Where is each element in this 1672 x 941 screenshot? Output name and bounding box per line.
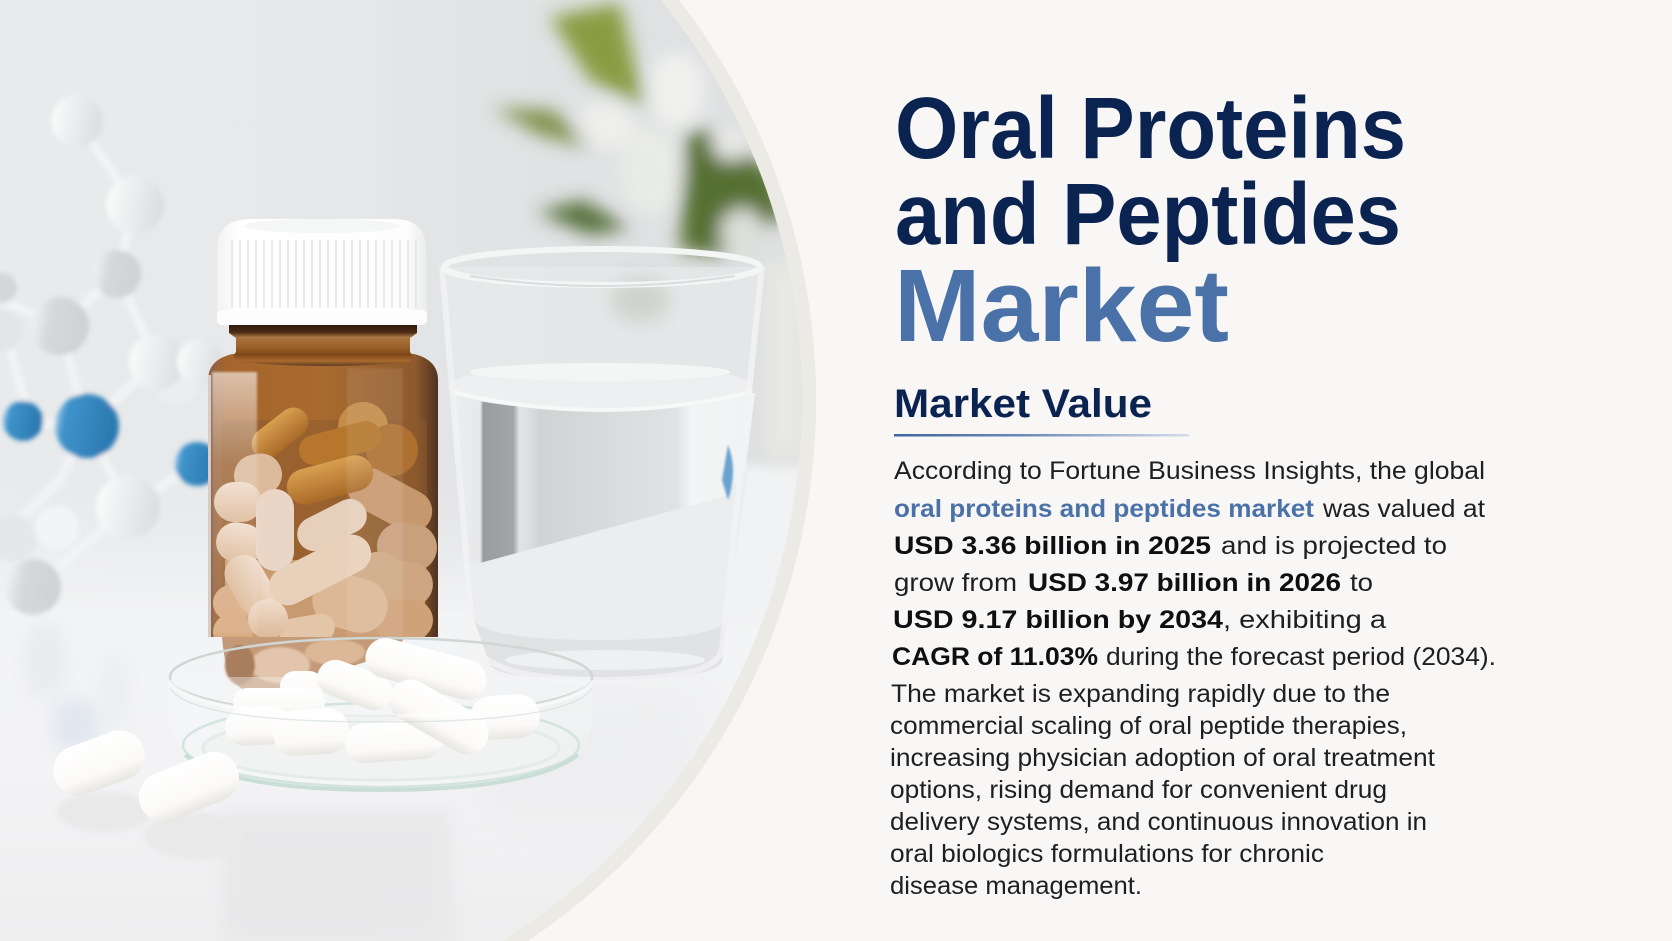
title [894,80,1406,363]
paragraph: market drivers: commercial scaling of oral peptide therapies, [890,712,1407,740]
bottle neck [229,325,417,366]
paragraph: market drivers: oral biologics formulations for chronic [890,840,1324,868]
empty upper glass [601,267,728,332]
paragraph: market drivers: The market is expanding rapidly due to the [891,680,1390,708]
blue refraction [722,445,733,500]
paragraph: market value statistics: to [1350,569,1373,597]
dish front rim [170,680,592,716]
title: Oral Proteins [895,80,1406,177]
paragraph: market value statistics: USD 3.36 billion in 2025 [894,532,1211,560]
paragraph: market value statistics: oral proteins and peptides market [894,495,1315,523]
paragraph: market value statistics: CAGR of 11.03% [892,643,1098,671]
paragraph: market value statistics: USD 3.97 billion in 2026 [1028,569,1341,597]
paragraph: market value statistics: during the forecast period (2034). [1106,643,1496,671]
bottle glass highlights [212,372,257,634]
paragraph: market drivers: options, rising demand for convenient drug [890,776,1387,804]
bottle reflection on table [238,818,442,884]
water column [453,393,755,640]
paragraph: market drivers: increasing physician adoption of oral treatment [890,744,1435,772]
glass walls and rim [442,267,762,680]
glass reflection on table [480,690,700,820]
photo wall background [399,0,786,500]
paragraph: market value statistics: was valued at [1322,495,1485,523]
loose capsule left [54,730,144,796]
thick glass base [474,621,722,677]
loose capsule right [139,752,239,822]
water surface [448,374,747,408]
paragraph: market value statistics: According to Fortune Business Insights, the global [894,457,1485,485]
paragraph: market value statistics: and is projected to [1221,532,1447,560]
molecule reflection on table [36,638,102,749]
dish base [226,677,283,689]
light lower water [480,509,692,640]
paragraph: market value statistics: USD 9.17 billion by 2034 [893,606,1223,634]
panel: product photo [0,0,820,941]
white capsules in dish [224,634,541,764]
title: Market [894,248,1229,363]
title: and Peptides [895,166,1401,263]
bottle body [208,354,438,637]
loose capsule shadows [60,794,216,854]
dish back rim [170,638,592,716]
photo table surface [0,620,760,941]
paragraph: market drivers [890,680,1435,900]
paragraph: market value statistics [892,457,1496,671]
paragraph: market value statistics: , exhibiting a [1223,606,1386,634]
section heading: Market Value: Market Value [894,382,1152,426]
heading underline [894,434,1189,436]
curved photo border ring [0,0,816,941]
glass of water [442,249,762,680]
bottle seen through dish [222,637,405,692]
molecular model [0,95,223,615]
glass petri dish with capsules [169,634,592,790]
blurred plant [493,3,805,460]
wall to table transition [0,556,468,610]
paragraph: market drivers: disease management. [890,872,1142,900]
paragraph: market drivers: delivery systems, and continuous innovation in [890,808,1427,836]
white ribbed cap [217,219,427,325]
amber pill bottle [208,219,440,692]
paragraph: market value statistics: grow from [894,569,1017,597]
capsules inside bottle [213,401,440,650]
